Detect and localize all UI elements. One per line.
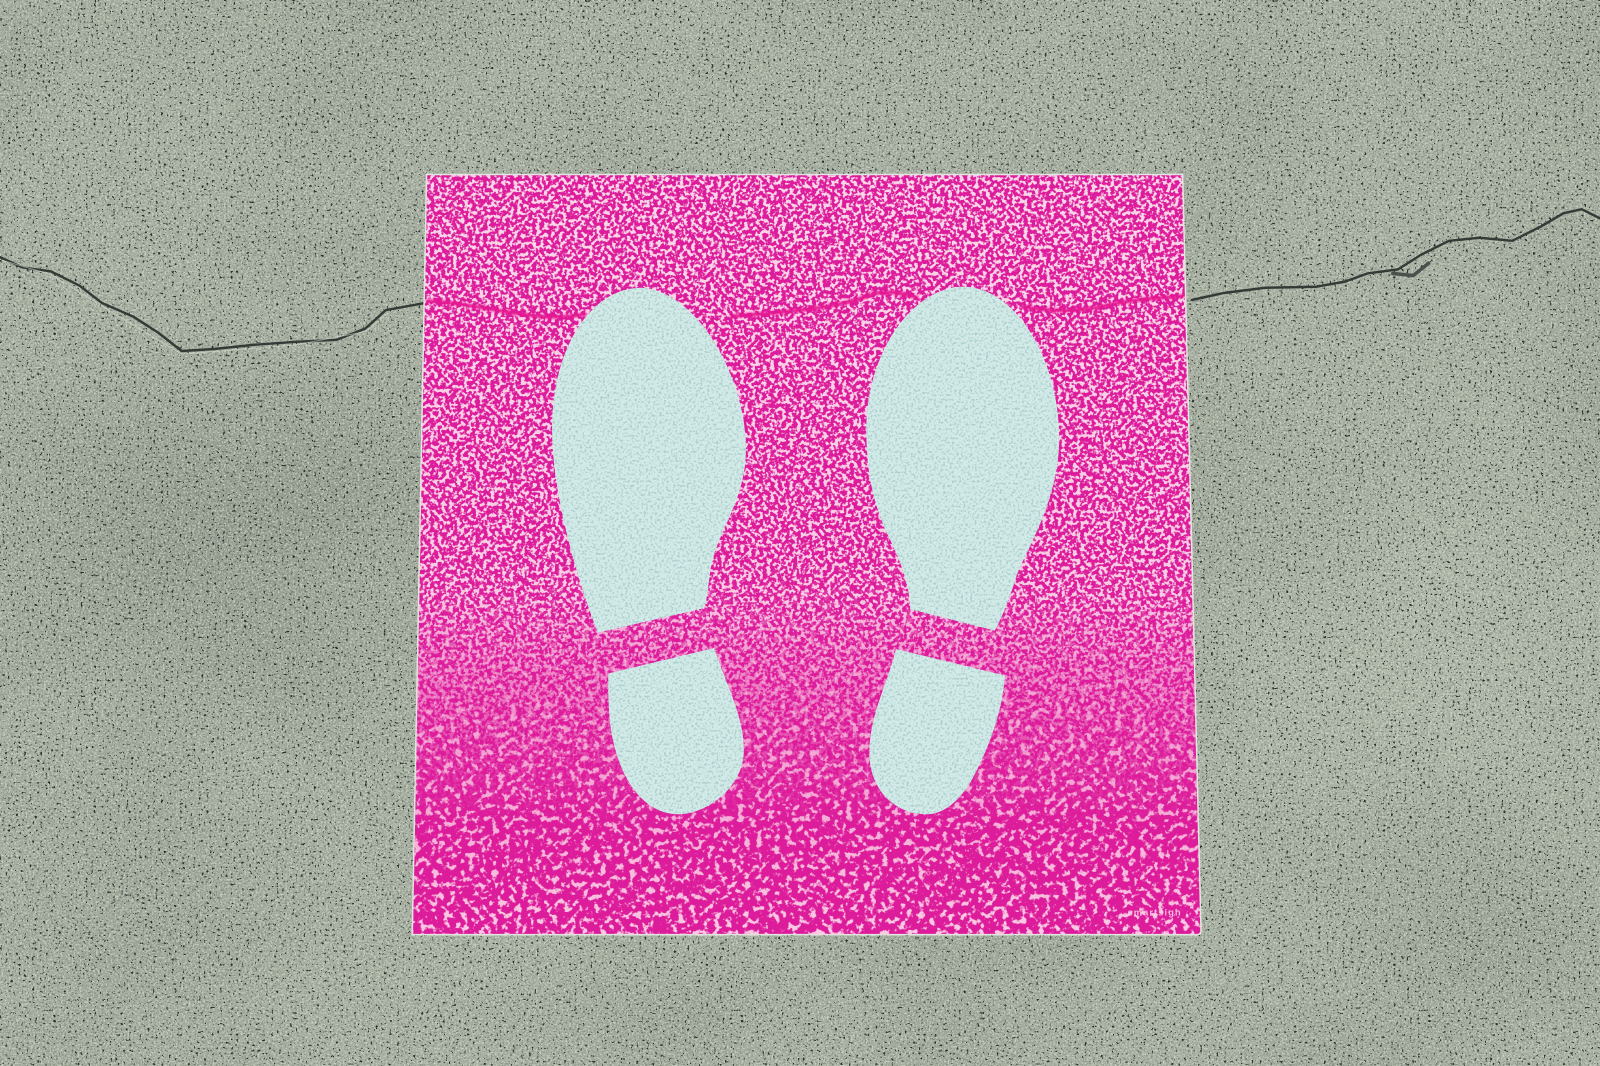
left footprint [552,288,746,814]
right sole [866,287,1059,631]
left sole [552,288,746,633]
footprint surface grain [541,276,1071,827]
small printed maker mark: smartsign [1128,907,1181,917]
left heel [608,648,744,814]
crack: right of marker [1192,209,1600,300]
right heel [869,649,1005,814]
crack: left of marker [0,257,424,354]
pink square floor marker [408,173,1214,939]
right footprint [866,287,1059,814]
